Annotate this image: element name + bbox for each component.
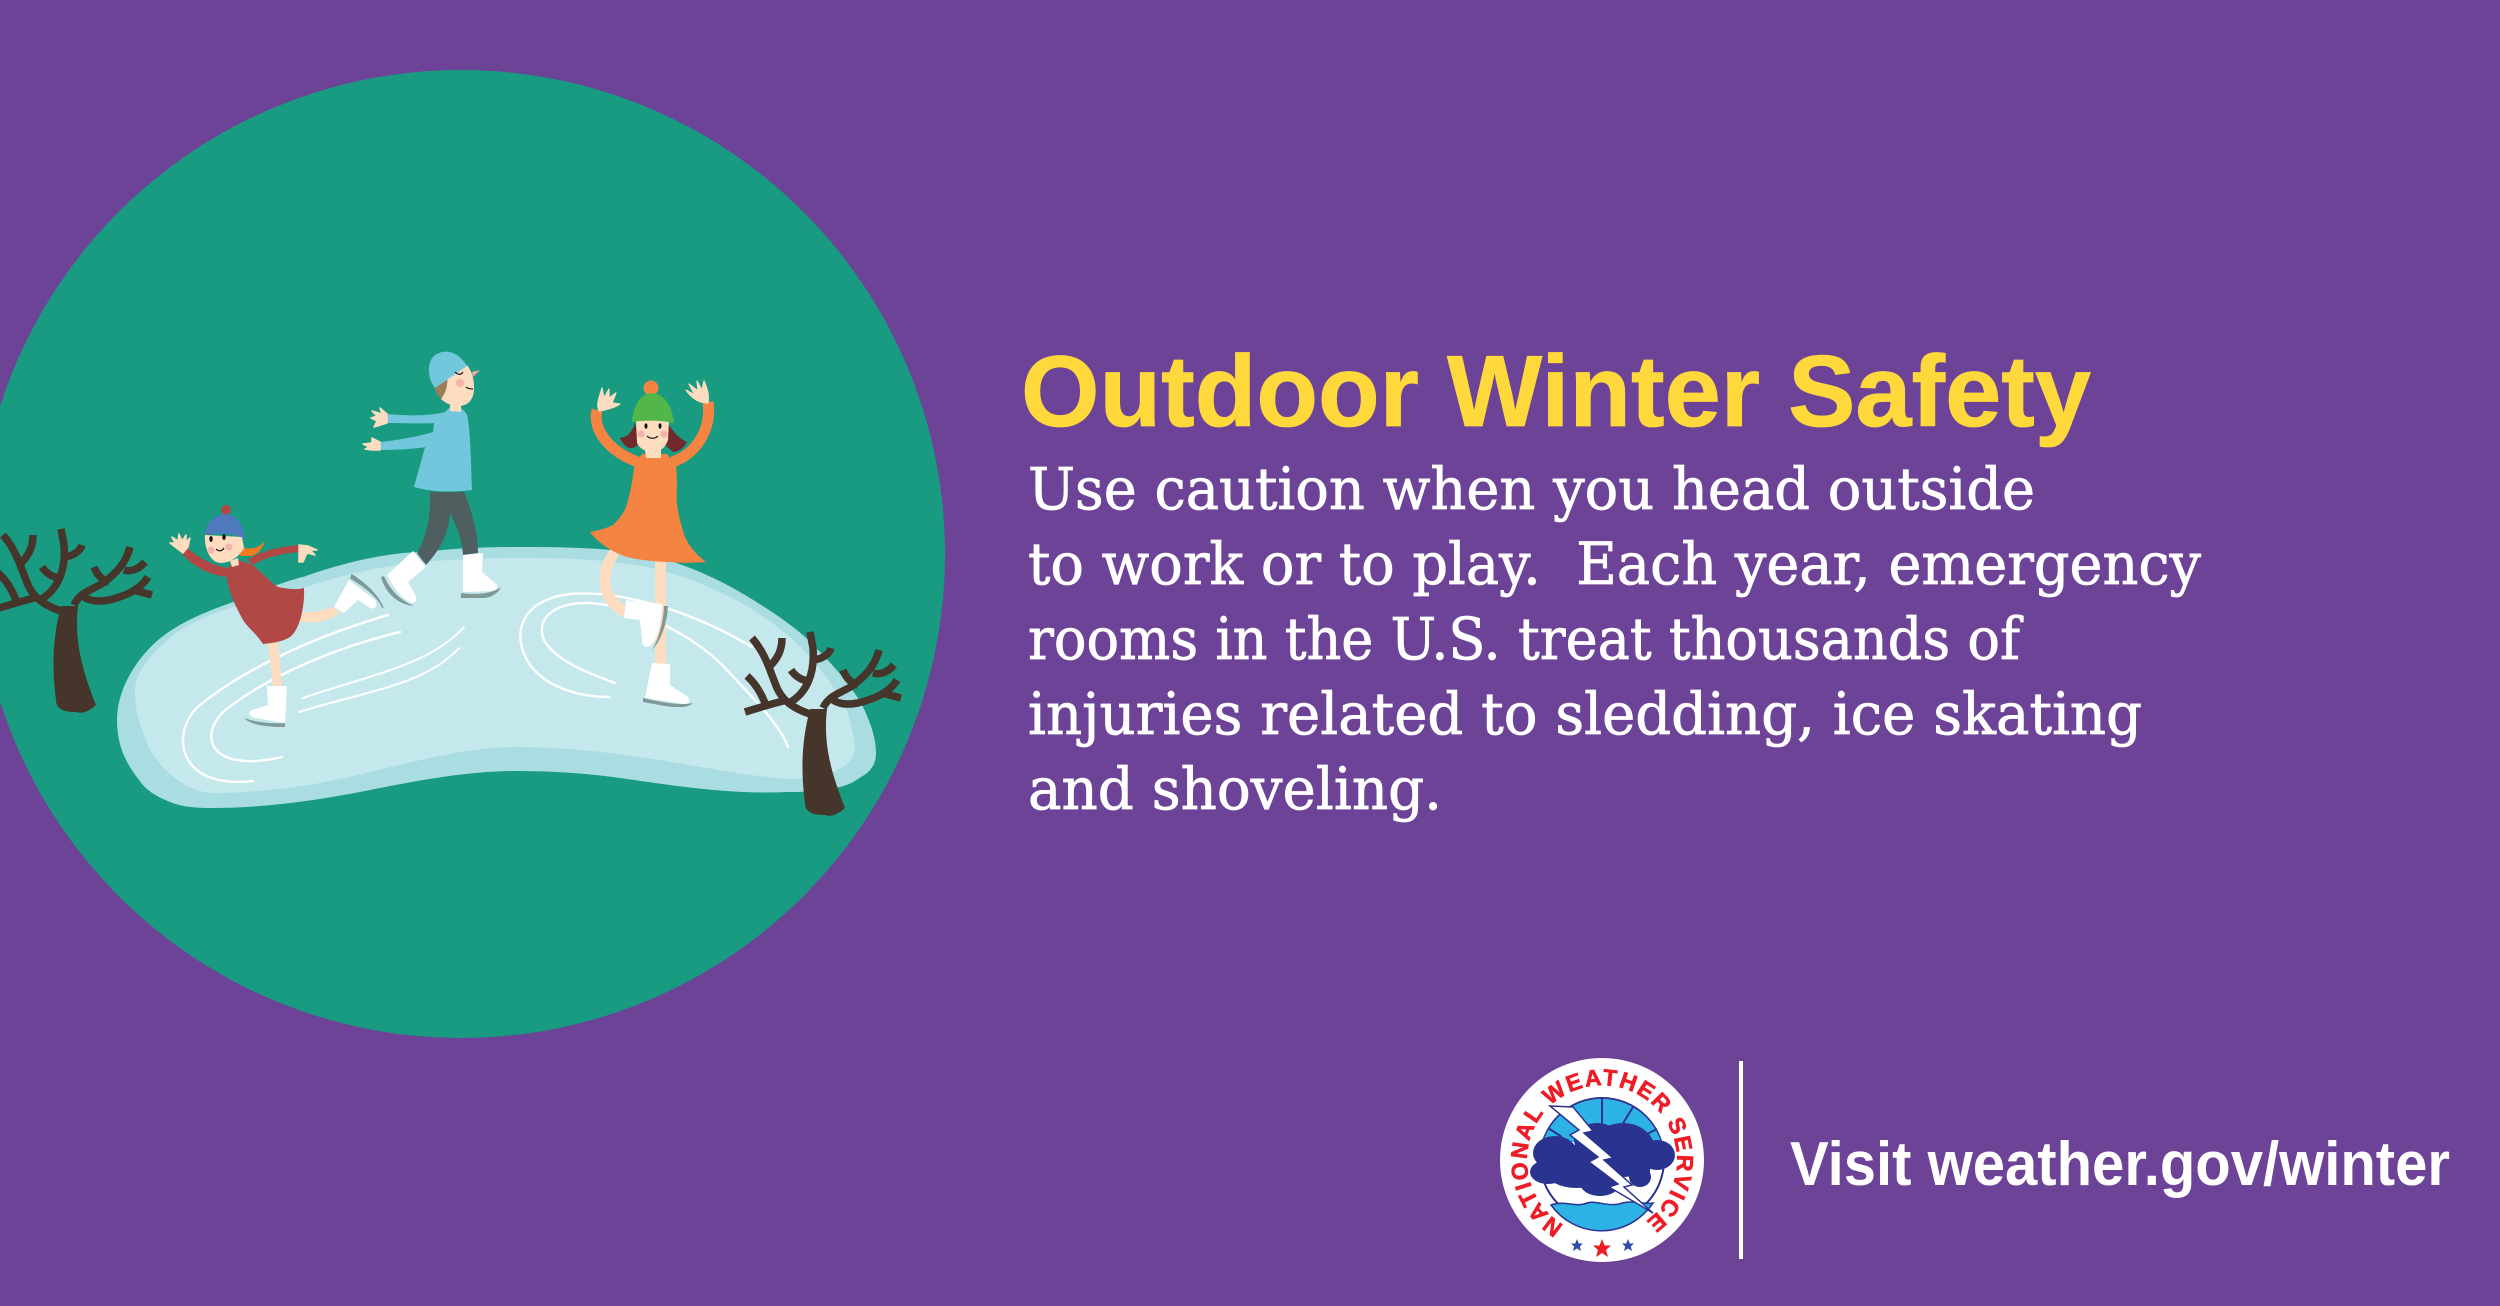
- left bare tree: [0, 529, 152, 713]
- body text: [1028, 455, 2201, 823]
- front skate: [249, 686, 287, 723]
- skates: [387, 551, 426, 603]
- logo stars: [1571, 1239, 1634, 1257]
- arms and dress: [182, 545, 300, 577]
- standing leg: [268, 642, 282, 687]
- hair: [233, 535, 265, 556]
- body text: rooms in the U.S. treat thousands of: [1028, 605, 2023, 673]
- skate marks on the ice: [183, 593, 788, 782]
- boy skater in blue: [363, 352, 501, 606]
- frozen pond: [117, 547, 876, 808]
- green circle background: [0, 70, 945, 1038]
- neck and hair: [645, 450, 661, 458]
- hands: [598, 381, 708, 411]
- body text: to work or to play. Each year, emergency: [1028, 530, 2201, 598]
- call to action: website: Visit weather.gov/winter: [1790, 1130, 2450, 1199]
- girl skater in red dress: [170, 505, 383, 727]
- title: Outdoor Winter Safety: [1021, 336, 2091, 448]
- icon: National Weather Service logo: [1500, 1058, 1704, 1262]
- raised leg: [605, 552, 627, 613]
- body text: Use caution when you head outside: [1028, 455, 2035, 523]
- illustration: skaters on frozen pond: [0, 70, 945, 1038]
- hands: [363, 408, 387, 450]
- girl skater in orange dress: [590, 380, 709, 707]
- standing leg: [655, 560, 666, 665]
- back leg: [298, 607, 340, 622]
- head: [441, 365, 474, 406]
- logo inner emblem: [1530, 1097, 1675, 1231]
- body text: injuries related to sledding, ice skating: [1028, 680, 2142, 748]
- hat and pompom: [221, 505, 231, 515]
- raised skate: [624, 600, 662, 647]
- logo ring text: NATIONAL WEATHER SERVICE: [1510, 1068, 1694, 1238]
- back skate: [334, 580, 376, 613]
- lower skate: [645, 663, 689, 704]
- arms and dress: [596, 402, 709, 462]
- face: [636, 420, 669, 452]
- right bare tree: [745, 632, 901, 816]
- hands: [170, 534, 317, 562]
- hat and pompom: [644, 380, 658, 396]
- face: [205, 535, 244, 563]
- body text: and shoveling.: [1028, 755, 1442, 823]
- lightning bolt: [1550, 1106, 1653, 1213]
- trousers: [417, 492, 478, 565]
- sweater: [380, 407, 472, 492]
